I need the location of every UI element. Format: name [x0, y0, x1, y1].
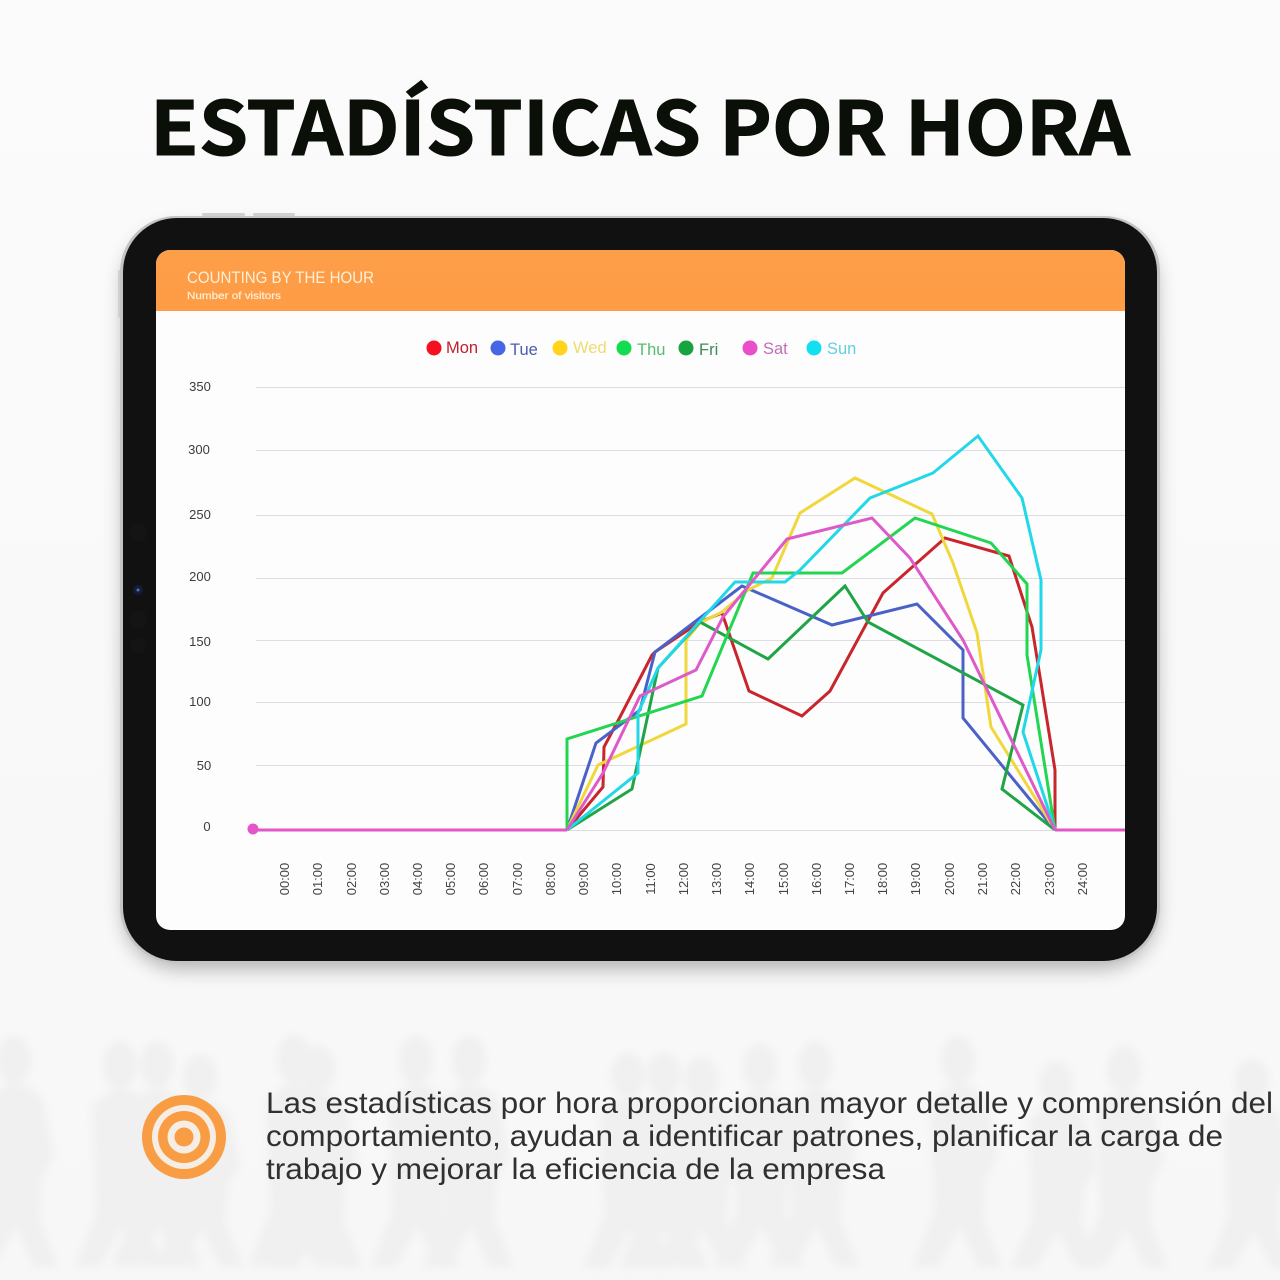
header subtitle: Number of visitors — [187, 290, 281, 302]
x axis labels: 07:00 — [510, 863, 525, 895]
background: crowd silhouettes — [0, 1035, 1280, 1269]
description text: trabajo y mejorar la eficiencia de la empresa — [266, 1153, 885, 1186]
x axis labels: 13:00 — [709, 863, 724, 895]
legend: Mon: Mon — [446, 339, 478, 357]
x axis labels: 09:00 — [576, 863, 591, 895]
legend: Tue — [490, 340, 538, 359]
x axis labels: 20:00 — [942, 863, 957, 895]
series: Thu — [567, 518, 1055, 830]
x axis labels: 08:00 — [543, 863, 558, 895]
x axis labels: 05:00 — [443, 863, 458, 895]
x axis labels: 21:00 — [975, 863, 990, 895]
x axis labels: 04:00 — [410, 863, 425, 895]
screen — [156, 250, 1125, 930]
tablet camera sensors — [129, 524, 147, 654]
y axis labels: 50 — [197, 758, 211, 773]
y axis labels: 300 — [188, 442, 210, 457]
legend — [426, 339, 856, 359]
legend: Sun: Sun — [827, 340, 856, 358]
tablet device — [118, 213, 1160, 968]
legend: Fri — [678, 340, 718, 359]
x axis labels: 23:00 — [1042, 863, 1057, 895]
x axis labels: 11:00 — [643, 863, 658, 895]
x axis labels: 02:00 — [344, 863, 359, 895]
series: Wed — [567, 478, 1055, 830]
x axis labels: 10:00 — [609, 863, 624, 895]
y axis labels: 0 — [203, 819, 211, 834]
legend: Wed: Wed — [573, 339, 607, 357]
y axis labels: 200 — [189, 569, 211, 584]
title: ESTADÍSTICAS POR HORA — [150, 70, 1131, 177]
chart header band — [156, 250, 1125, 311]
x axis labels: 15:00 — [776, 863, 791, 895]
line chart — [188, 379, 1125, 895]
x axis labels: 12:00 — [676, 863, 691, 895]
x axis labels — [277, 863, 1090, 895]
x axis labels: 06:00 — [476, 863, 491, 895]
legend: Sat: Sat — [763, 340, 788, 358]
x axis labels: 00:00 — [277, 863, 292, 895]
start point marker — [248, 824, 258, 834]
y axis labels: 250 — [189, 507, 211, 522]
x axis labels: 16:00 — [809, 863, 824, 895]
series: Fri — [567, 586, 1055, 830]
description text — [266, 1087, 1273, 1186]
description text: Las estadísticas por hora proporcionan mayor detalle y comprensión del — [266, 1087, 1273, 1120]
y axis labels: 350 — [189, 379, 211, 394]
x axis labels: 22:00 — [1008, 863, 1023, 895]
description text: comportamiento, ayudan a identificar patrones, planificar la carga de — [266, 1120, 1223, 1153]
tablet buttons — [118, 213, 295, 318]
legend: Sun — [806, 340, 856, 358]
legend: Thu — [616, 340, 665, 359]
x axis labels: 17:00 — [842, 863, 857, 895]
series: Sat — [567, 518, 1055, 830]
series: Sun — [567, 436, 1055, 830]
y axis labels: 100 — [189, 694, 211, 709]
x axis labels: 18:00 — [875, 863, 890, 895]
legend: Fri: Fri — [699, 341, 718, 359]
y axis labels — [188, 379, 211, 834]
x axis labels: 19:00 — [908, 863, 923, 895]
legend: Sat — [742, 340, 788, 358]
y axis labels: 150 — [189, 634, 211, 649]
baseline: zero values — [253, 828, 1125, 832]
legend: Tue: Tue — [510, 341, 538, 359]
header title: COUNTING BY THE HOUR — [187, 269, 374, 287]
x axis labels: 14:00 — [742, 863, 757, 895]
series: Mon — [567, 538, 1055, 830]
icon: target — [142, 1095, 226, 1179]
data series lines — [253, 436, 1125, 830]
legend: Wed — [552, 339, 607, 357]
x axis labels: 24:00 — [1075, 863, 1090, 895]
legend: Mon — [426, 339, 478, 357]
series: Tue — [567, 586, 1055, 830]
legend: Thu: Thu — [637, 341, 665, 359]
x axis labels: 03:00 — [377, 863, 392, 895]
x axis labels: 01:00 — [310, 863, 325, 895]
